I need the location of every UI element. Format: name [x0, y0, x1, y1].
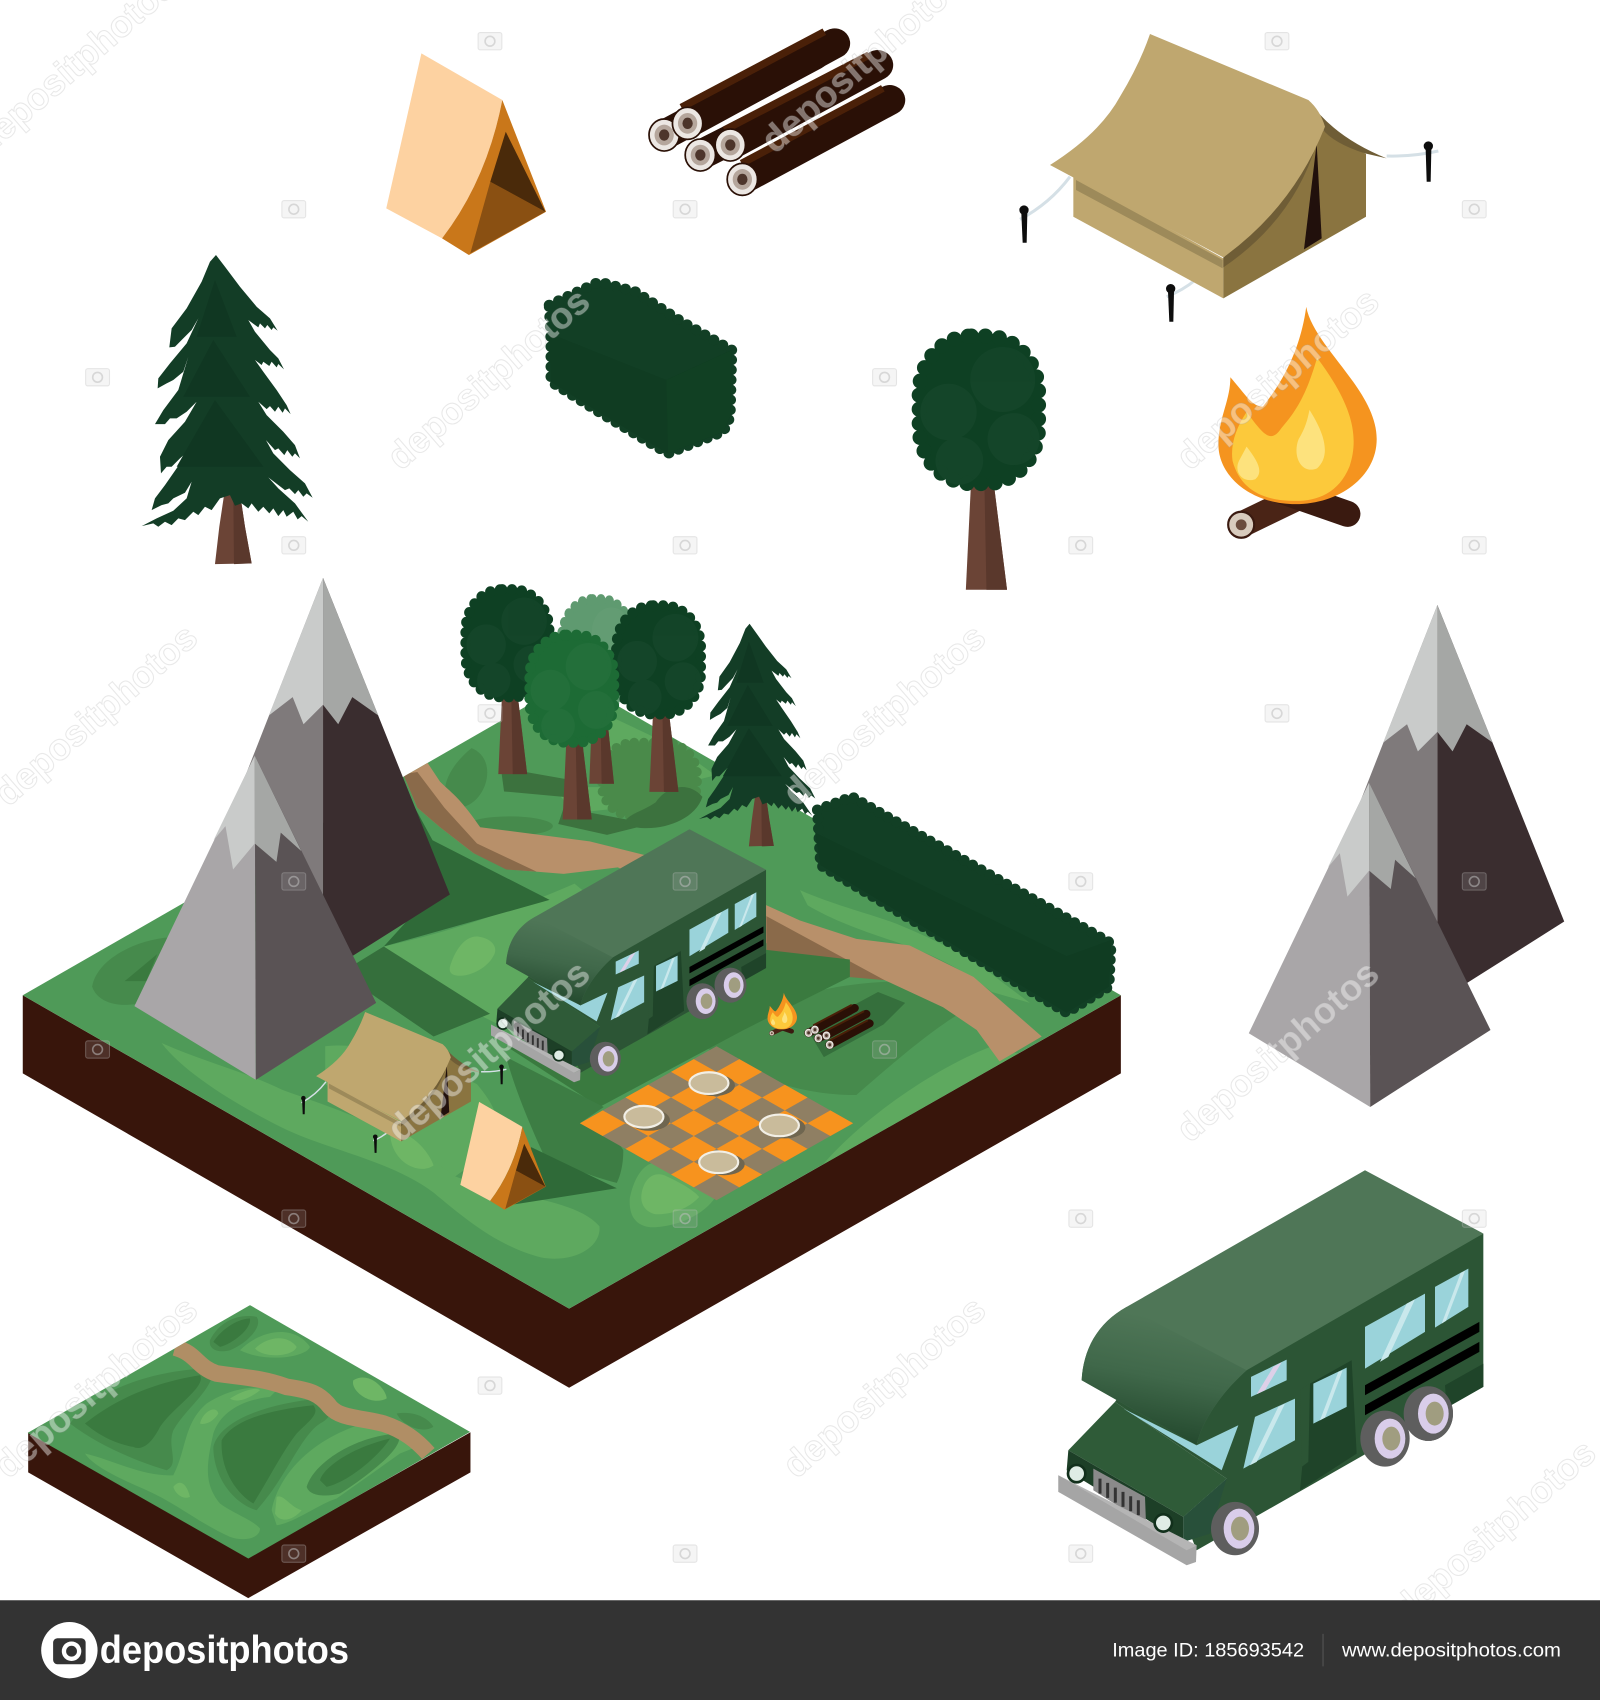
watermark text: depositphotos	[379, 952, 597, 1150]
mountains on block	[134, 578, 450, 1080]
watermark text: depositphotos	[1385, 1431, 1600, 1629]
small tent on block	[460, 1102, 546, 1210]
footer image id: Image ID: 185693542	[1112, 1640, 1304, 1662]
panel: main isometric camp block	[0, 578, 1192, 1388]
picnic blanket	[580, 1046, 853, 1200]
bushes behind trees	[602, 743, 702, 828]
icon: hedge block	[549, 282, 732, 453]
footer logo icon	[41, 1622, 98, 1678]
tile soil sides	[28, 1432, 470, 1598]
pine on block	[699, 624, 815, 846]
icon: round tree	[919, 336, 1040, 590]
logs on block	[805, 1005, 870, 1049]
icon: pine tree	[142, 255, 313, 564]
tree centre	[530, 635, 615, 820]
icon: standalone mountains	[1249, 605, 1564, 1107]
icon: stacked logs	[649, 32, 890, 195]
long hedge	[815, 797, 1111, 1013]
icon: large canvas tent	[1019, 34, 1438, 322]
watermark text: depositphotos	[775, 1288, 993, 1486]
camper van on block	[491, 829, 766, 1082]
tree left	[466, 590, 550, 774]
footer website: www.depositphotos.com	[1341, 1640, 1561, 1662]
tree right	[616, 606, 701, 792]
watermark camera icons	[86, 33, 1486, 1562]
ground shadows	[350, 768, 905, 1206]
icon: large camper van	[1058, 1170, 1483, 1565]
watermark text: depositphotos	[379, 280, 597, 477]
block terrain surface	[22, 706, 1121, 1308]
watermark text: depositphotos	[1168, 952, 1387, 1150]
tile surface	[0, 1290, 500, 1590]
footer bar	[0, 1600, 1600, 1700]
block soil sides	[23, 995, 1121, 1388]
icon: campfire	[1218, 307, 1377, 538]
footer logo wordmark: depositphotos	[100, 1629, 349, 1672]
campfire on block	[768, 993, 797, 1036]
icon: small A-frame tent	[386, 53, 546, 255]
panel: small terrain tile	[0, 1290, 500, 1598]
faded tree	[561, 600, 633, 784]
canvas tent on block	[301, 1012, 506, 1153]
watermark text: depositphotos	[775, 616, 993, 814]
watermark text: depositphotos	[1168, 280, 1387, 477]
